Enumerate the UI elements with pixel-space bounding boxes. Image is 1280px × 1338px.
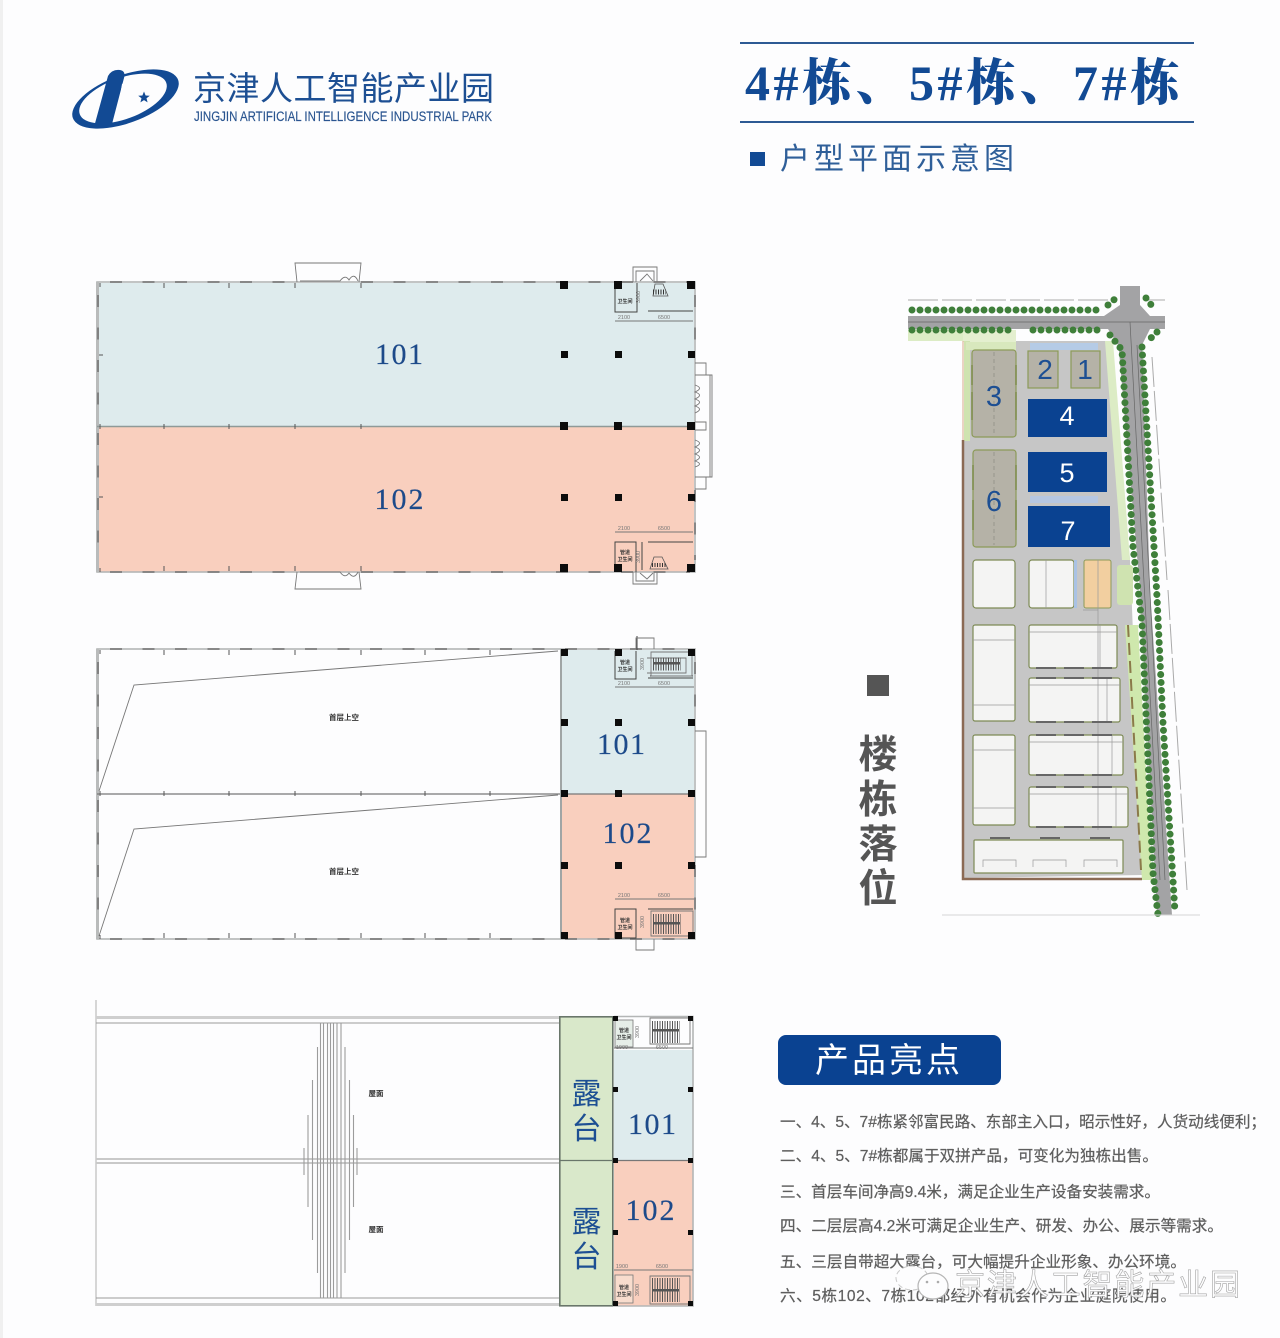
bottom service core: 卫生间 (617, 924, 633, 931)
building 5 (1028, 452, 1107, 492)
building numbers: 5 (1059, 458, 1075, 488)
top service core: 管道 (620, 659, 630, 666)
watermark (896, 1266, 1240, 1302)
top service core: 3900 (636, 291, 642, 303)
building numbers: 7 (1060, 516, 1076, 546)
water strip (1030, 343, 1098, 350)
unit label 101: 101 (628, 1108, 676, 1141)
bottom service core: 6500 (656, 1264, 668, 1270)
building 7 (1028, 506, 1110, 547)
ground (964, 341, 1143, 878)
ground line (942, 914, 1200, 916)
product highlights button: 产品亮点 (815, 1042, 960, 1080)
highlights list: 三、首层车间净高9.4米，满足企业生产设备安装需求。 (780, 1183, 1160, 1201)
top service core (615, 636, 694, 687)
unit label 102: 102 (626, 1194, 674, 1227)
top service core: 3900 (635, 1026, 641, 1038)
structural columns (613, 1016, 693, 1306)
bottom service core: 6500 (658, 893, 670, 899)
highlights list (780, 1113, 1266, 1305)
section marker: building location: 栋 (858, 779, 898, 822)
bottom service core: 6500 (658, 526, 670, 532)
terrace panel (560, 1017, 613, 1306)
bottom service core: 卫生间 (617, 556, 633, 563)
entrance canopy bottom (295, 572, 361, 589)
east side entrance (695, 363, 712, 489)
top service core (614, 1018, 693, 1051)
top service core: 2100 (618, 315, 630, 321)
lower row buildings (973, 560, 1133, 873)
top service core: 3900 (640, 658, 646, 670)
section marker: building location: 位 (858, 868, 898, 911)
void outline upper (99, 651, 558, 791)
terrace label upper (572, 1078, 602, 1146)
void label lower: 首层上空 (329, 866, 359, 876)
wall ticks (100, 650, 490, 939)
section marker: building location (858, 675, 898, 911)
building 6 (973, 450, 1016, 547)
highlights list: 六、5栋102、7栋102都经外有机会作为企业庭院使用。 (780, 1286, 1176, 1305)
floor plan: first floor (97, 263, 712, 589)
logo Chinese name: 京津人工智能产业园 (193, 70, 494, 107)
section marker: building location: 楼 (858, 734, 898, 777)
roof bands (96, 1016, 560, 1306)
title: 4#栋、5#栋、7#栋 (745, 55, 1184, 111)
top service core: 1900 (616, 1045, 628, 1051)
bottom service core (615, 526, 693, 584)
building 2 (1028, 351, 1058, 388)
void outline lower (99, 795, 558, 936)
top service core: 6500 (658, 681, 670, 687)
structural columns (561, 649, 695, 939)
icon: park emblem (65, 57, 186, 141)
terrace label upper: 露 (572, 1078, 602, 1111)
terrace label lower: 台 (572, 1241, 602, 1274)
bottom service core: 3900 (636, 551, 642, 563)
building 4 (1028, 399, 1107, 437)
terrace label lower (572, 1206, 602, 1274)
void label upper: 首层上空 (329, 712, 359, 722)
bottom service core: 3900 (635, 1284, 641, 1296)
product highlights button (778, 1035, 1001, 1085)
building 3 (972, 350, 1016, 437)
gap between 5 and 7 (1030, 496, 1098, 503)
road edge lines (908, 300, 1187, 890)
green belts (908, 330, 1152, 880)
building numbers: 4 (1059, 401, 1075, 431)
terrace label upper: 台 (572, 1113, 602, 1146)
bottom service core: 管道 (620, 917, 630, 924)
roof label upper: 屋面 (368, 1089, 384, 1098)
entrance canopy top (295, 263, 361, 282)
building numbers: 3 (986, 381, 1002, 413)
highlights list: 五、三层自带超大露台，可大幅提升企业形象、办公环境。 (780, 1252, 1186, 1271)
highlights list: 四、二层层高4.2米可满足企业生产、研发、办公、展示等需求。 (780, 1217, 1223, 1235)
building numbers: 6 (986, 486, 1002, 518)
top service core: 6500 (658, 315, 670, 321)
structural columns (560, 281, 695, 572)
unit label 101: 101 (597, 728, 645, 761)
top service core: 卫生间 (617, 666, 633, 673)
site boundary (963, 440, 1142, 879)
unit label 102: 102 (374, 483, 424, 516)
top service core: 6500 (656, 1045, 668, 1051)
roads (908, 286, 1172, 915)
icon: chat bubbles (896, 1266, 948, 1299)
logo English name: JINGJIN ARTIFICIAL INTELLIGENCE INDUSTRIAL PARK (194, 109, 492, 124)
bottom service core (615, 893, 694, 950)
top service core (615, 267, 693, 321)
building numbers: 2 (1037, 354, 1053, 385)
building numbers (986, 354, 1093, 546)
building 1 (1071, 351, 1100, 388)
unit label 102: 102 (602, 817, 652, 850)
site plan (908, 286, 1200, 915)
bottom service core: 1900 (616, 1264, 628, 1270)
unit 102 area (614, 1160, 693, 1306)
unit 101 area (614, 1050, 693, 1160)
building numbers: 1 (1077, 354, 1093, 385)
top service core: 管道 (619, 1027, 629, 1034)
east side rail (695, 731, 706, 857)
bottom service core: 3900 (640, 916, 646, 928)
unit label 101: 101 (375, 338, 423, 371)
section marker: building location: 落 (858, 824, 898, 867)
wall ticks (99, 283, 361, 572)
bottom service core: 管道 (619, 1284, 629, 1291)
floor plan: second floor (97, 636, 706, 950)
highlights list: 一、4、5、7#栋紧邻富民路、东部主入口，昭示性好，人货动线便利； (780, 1113, 1266, 1131)
bottom service core: 2100 (618, 526, 630, 532)
bottom service core: 卫生间 (616, 1291, 632, 1298)
roof label lower: 屋面 (368, 1225, 384, 1234)
bottom service core: 管道 (620, 549, 630, 556)
logo (65, 57, 494, 141)
top service core: 2100 (618, 681, 630, 687)
watermark name: 京津人工智能产业园 (955, 1269, 1240, 1302)
skylight ribs (304, 1023, 357, 1298)
top service core: 卫生间 (616, 1034, 632, 1041)
bottom service core: 2100 (618, 893, 630, 899)
highlights list: 二、4、5、7#栋都属于双拼产品，可变化为独栋出售。 (780, 1147, 1158, 1165)
floor plan: third floor and roof (96, 1000, 693, 1306)
subtitle: 户型平面示意图 (780, 143, 1014, 176)
terrace label lower: 露 (572, 1206, 602, 1239)
trees (912, 298, 1175, 915)
bottom service core (614, 1264, 693, 1304)
top service core: 卫生间 (617, 298, 633, 305)
